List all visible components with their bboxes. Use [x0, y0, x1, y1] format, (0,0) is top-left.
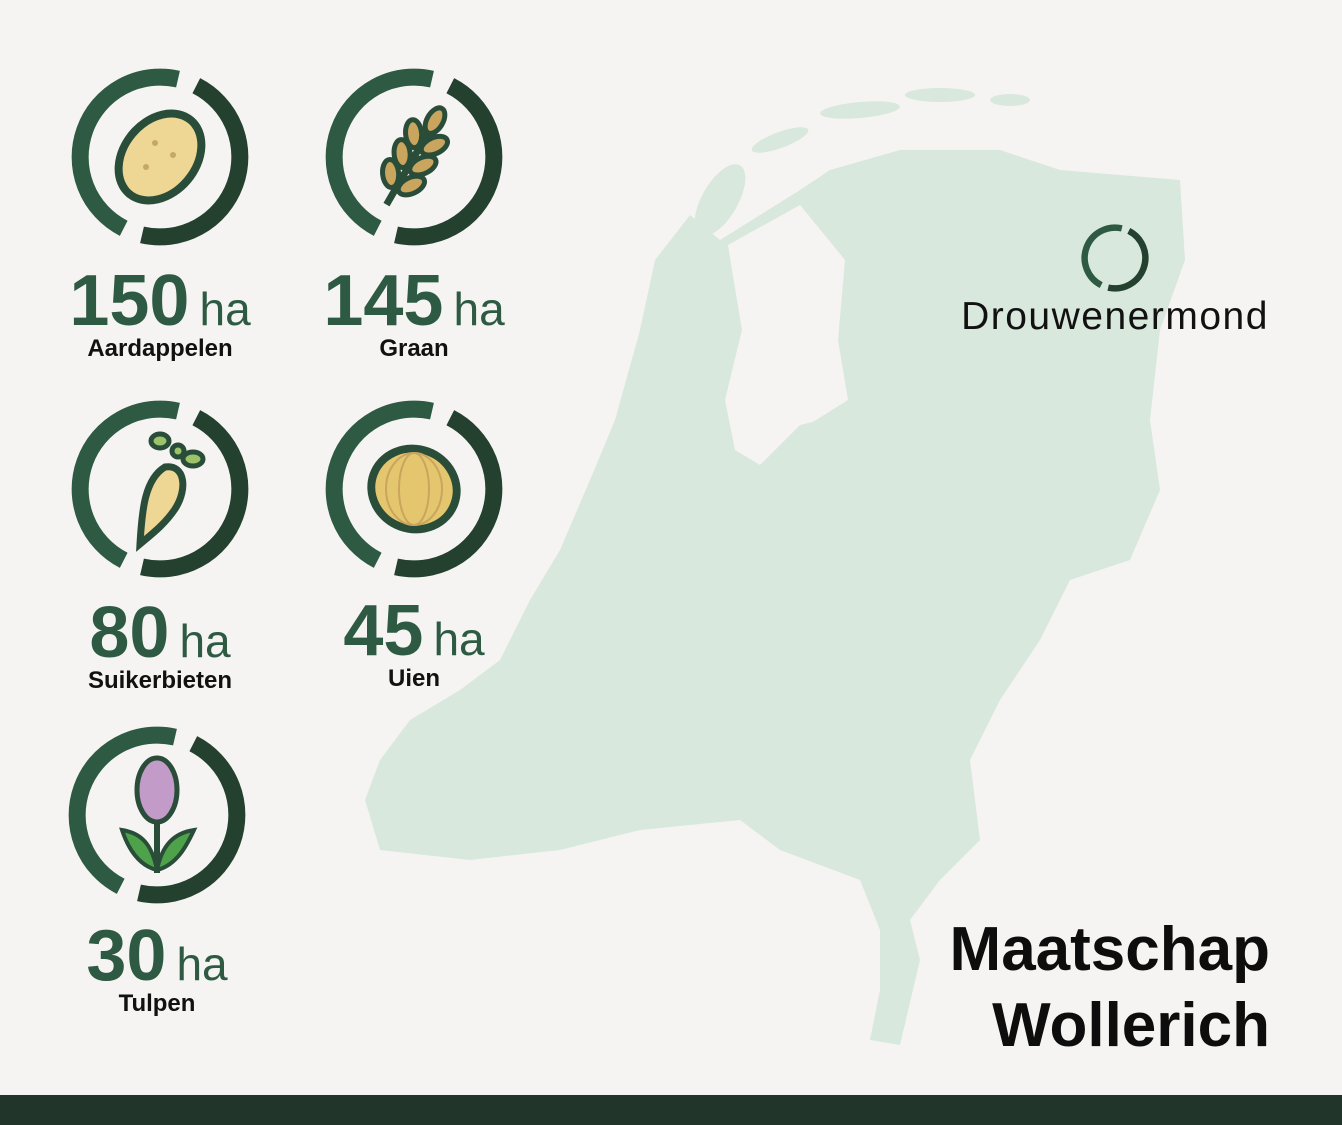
icon ring: suikerbieten [72, 400, 248, 578]
stat: uien: Uien [388, 665, 440, 692]
title: Wollerich [992, 991, 1270, 1060]
icon ring: potato [72, 68, 248, 246]
stat: aardappelen: Aardappelen [87, 335, 233, 362]
stat: graan: 145ha [323, 261, 505, 341]
icon ring: graan [326, 68, 502, 246]
stat: tulpen: Tulpen [119, 990, 195, 1017]
stat: suikerbieten: 80ha [89, 593, 231, 673]
stat: tulpen: 30ha [86, 916, 228, 996]
stat: suikerbieten: Suikerbieten [88, 667, 232, 694]
title: Maatschap [950, 915, 1270, 984]
location marker: Drouwenermond [961, 224, 1269, 338]
location marker: Drouwenermond: Drouwenermond [961, 295, 1269, 338]
icon ring: tulpen [68, 726, 246, 904]
title [950, 915, 1270, 1060]
icon ring: uien [326, 400, 502, 578]
stat: aardappelen: 150ha [69, 261, 251, 341]
stat: uien: 45ha [343, 591, 485, 671]
stat: graan: Graan [379, 335, 449, 362]
